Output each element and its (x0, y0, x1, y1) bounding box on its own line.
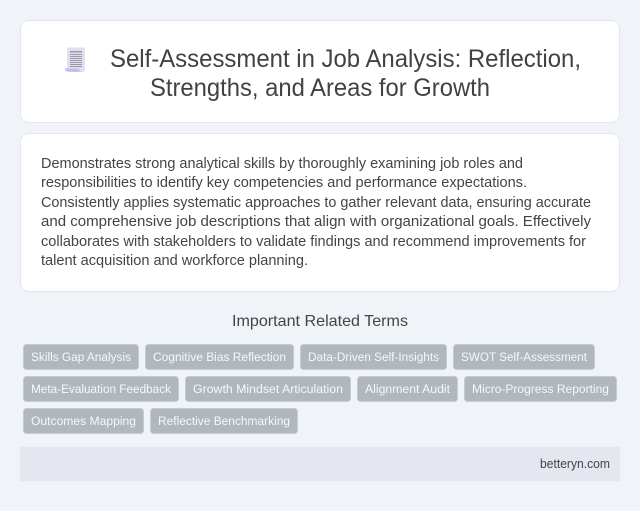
text block: description: Demonstrates strong analytical skills by thoroughly examining job roles and (41, 156, 523, 172)
tag: Skills Gap Analysis (24, 344, 138, 370)
tag: Reflective Benchmarking: Reflective Benchmarking (158, 414, 290, 428)
tag: Outcomes Mapping: Outcomes Mapping (31, 414, 136, 428)
tag: Meta-Evaluation Feedback (24, 376, 178, 402)
tag: Data-Driven Self-Insights (300, 344, 446, 370)
text block: description: responsibilities to identify key competencies and performance expectations. (41, 175, 527, 191)
icon: document scroll (65, 48, 85, 72)
tag: SWOT Self-Assessment: SWOT Self-Assessment (461, 350, 588, 364)
tag: Reflective Benchmarking (150, 408, 298, 434)
footer bar (20, 447, 620, 481)
tag: Growth Mindset Articulation: Growth Mindset Articulation (193, 382, 343, 396)
tags: related terms (24, 344, 616, 434)
tag: Alignment Audit (358, 376, 458, 402)
tag: Micro-Progress Reporting: Micro-Progress Reporting (472, 382, 609, 396)
footer: site name: betteryn.com (540, 457, 610, 471)
tag: Growth Mindset Articulation (186, 376, 350, 402)
title (110, 45, 581, 102)
tag: Alignment Audit: Alignment Audit (365, 382, 451, 396)
text block: description (41, 156, 592, 269)
tag: Meta-Evaluation Feedback: Meta-Evaluation Feedback (31, 382, 172, 396)
tag: Data-Driven Self-Insights: Data-Driven Self-Insights (308, 350, 439, 364)
tag: Outcomes Mapping (24, 408, 144, 434)
text block: description: and comprehensive job descriptions that align with organizational goals. Effectively (41, 214, 592, 230)
tag: Cognitive Bias Reflection (146, 344, 294, 370)
tag: SWOT Self-Assessment (454, 344, 594, 370)
tag: Skills Gap Analysis: Skills Gap Analysis (31, 350, 131, 364)
heading: related terms: Important Related Terms (232, 313, 408, 330)
text block: description: talent acquisition and workforce planning. (41, 253, 308, 269)
panel: title header (20, 20, 620, 122)
panel: description (20, 134, 620, 292)
title: Strengths, and Areas for Growth (150, 74, 490, 102)
title: Self-Assessment in Job Analysis: Reflection, (110, 45, 581, 73)
text block: description: collaborates with stakeholders to validate findings and recommend improvements for (41, 234, 586, 250)
tag: Micro-Progress Reporting (464, 376, 616, 402)
tag: Cognitive Bias Reflection: Cognitive Bias Reflection (153, 350, 286, 364)
text block: description: Consistently applies systematic approaches to gather relevant data, ensuring accurate (41, 195, 591, 211)
